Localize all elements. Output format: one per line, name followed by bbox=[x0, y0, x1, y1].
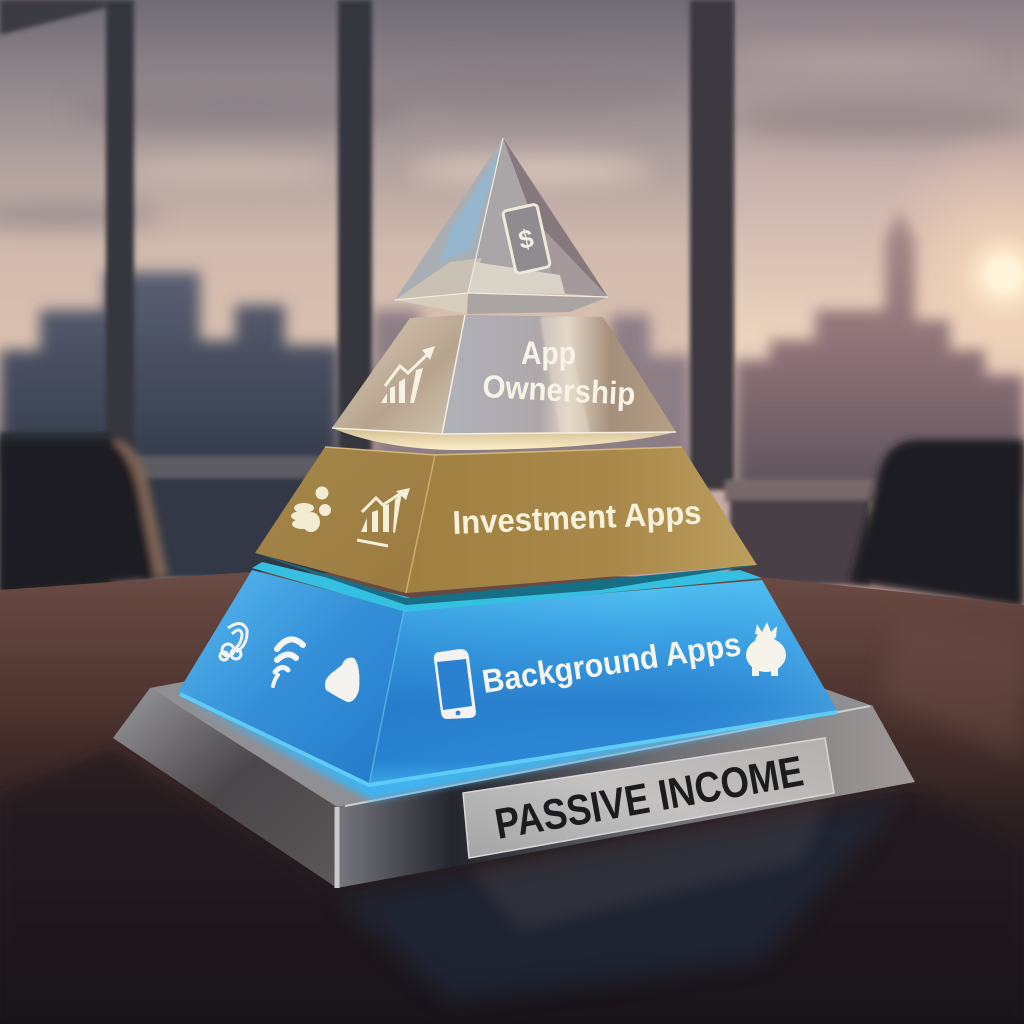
tier: background apps bbox=[178, 562, 838, 800]
icon: wifi bbox=[273, 639, 303, 686]
skyline left bbox=[0, 272, 692, 480]
label: investment apps: Investment Apps bbox=[452, 494, 702, 541]
tier: app ownership bbox=[332, 315, 676, 450]
icon: piggy bank with crown bbox=[746, 622, 786, 676]
label: app ownership: Ownership bbox=[482, 368, 636, 412]
icon: investment growth chart bbox=[357, 488, 410, 546]
table bbox=[0, 572, 1024, 1024]
plate: passive income: PASSIVE INCOME bbox=[491, 747, 807, 849]
label: app ownership: App bbox=[521, 335, 576, 371]
top glass prism bbox=[395, 138, 608, 314]
icon: ownership growth chart bbox=[381, 346, 435, 403]
base left side bbox=[113, 688, 337, 888]
metal base bbox=[113, 660, 915, 888]
base front side bbox=[337, 705, 915, 888]
icon: fingerprint bbox=[220, 623, 247, 660]
icon: smartphone bbox=[434, 649, 476, 719]
icon: phone with dollar: $ bbox=[516, 223, 537, 255]
window frames bbox=[0, 0, 875, 592]
tier: investment apps bbox=[255, 447, 757, 605]
label: app ownership bbox=[482, 335, 636, 412]
background: blurred city window view bbox=[0, 0, 1024, 610]
icon: phone with dollar bbox=[502, 204, 550, 274]
chairs bbox=[0, 440, 1024, 608]
icon: coins bbox=[291, 486, 331, 532]
skyline right bbox=[735, 210, 1024, 490]
icon: cloud bbox=[325, 658, 359, 702]
label: background apps: Background Apps bbox=[480, 625, 743, 700]
